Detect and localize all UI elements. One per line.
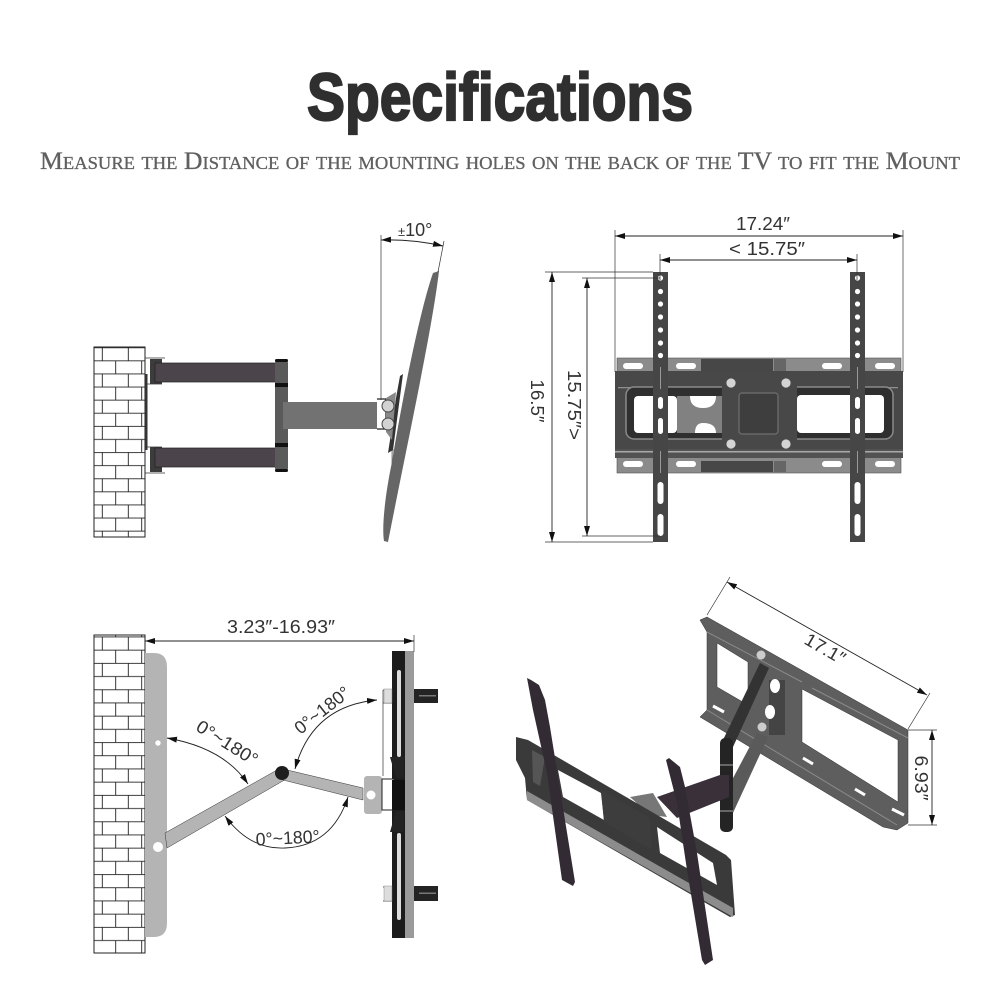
dimension: extension range: 3.23″-16.93″ xyxy=(227,617,336,637)
angle arc: between arms: 0°~180° xyxy=(255,826,320,850)
swivel knuckle xyxy=(630,793,667,817)
right strip xyxy=(666,758,713,965)
left vertical strip xyxy=(653,272,668,542)
dimension: 16.5 inch height xyxy=(527,272,653,542)
wall plate xyxy=(145,653,167,937)
right vertical strip xyxy=(850,272,865,542)
tilt dimension xyxy=(381,220,444,400)
dimension: 6.93 inch xyxy=(908,730,937,825)
title: Specifications xyxy=(307,60,693,135)
dimension: 15.75 inch horizontal: < 15.75″ xyxy=(729,239,806,259)
dimension: 6.93 inch: 6.93″ xyxy=(911,756,931,801)
upper arm xyxy=(155,363,282,382)
angle arc: wall plate to arm xyxy=(167,716,262,784)
upper arm xyxy=(723,663,769,747)
dimension: 17.1 inch xyxy=(707,577,930,729)
wall plate xyxy=(700,617,908,830)
tilt bracket xyxy=(377,374,403,466)
stud upper xyxy=(414,689,438,703)
second arm xyxy=(283,769,363,800)
front arm xyxy=(657,775,729,818)
pivot ball xyxy=(275,766,289,780)
first arm xyxy=(165,770,288,848)
tilt dimension: ±10° xyxy=(398,220,432,240)
wall plate xyxy=(617,358,901,473)
panel: front view with VESA dimensions xyxy=(527,214,903,542)
dimension: 16.5 inch height: 16.5″ xyxy=(527,380,547,423)
TV plate xyxy=(383,271,439,542)
lower arm xyxy=(732,733,768,815)
TV bracket section xyxy=(382,651,414,938)
brick wall xyxy=(94,347,145,537)
TV bracket body xyxy=(615,371,903,458)
subtitle: Measure the Distance of the mounting holes on the back of the TV to fit the Mount xyxy=(40,148,960,175)
angle arc: wall plate to arm: 0°~180° xyxy=(193,716,262,770)
dimension: 15.75 inch horizontal xyxy=(660,239,857,280)
wall bracket edge and fittings xyxy=(145,358,165,473)
dimension: 15.75 inch vertical xyxy=(564,278,660,536)
lower arm xyxy=(155,448,282,467)
angle arc: arm to bracket xyxy=(291,682,377,769)
stud lower xyxy=(414,886,438,901)
angle arc: arm to bracket: 0°~180° xyxy=(291,682,354,738)
dimension: 17.1 inch: 17.1″ xyxy=(801,629,850,669)
TV bracket plate xyxy=(516,737,735,917)
pivot column xyxy=(275,359,288,472)
dimension: 15.75 inch vertical: 15.75″> xyxy=(564,370,584,440)
dimension: 17.24 inch width xyxy=(615,214,903,372)
middle arm xyxy=(283,402,377,429)
left strip xyxy=(527,678,575,886)
column xyxy=(720,738,733,832)
brick wall xyxy=(94,635,145,953)
panel: top view with swivel angles xyxy=(94,617,438,953)
wall plate holes xyxy=(153,740,163,852)
dimension: 17.24 inch width: 17.24″ xyxy=(736,214,791,234)
panel: tilt side view xyxy=(94,220,444,542)
panel: isometric view xyxy=(516,577,937,965)
angle arc: between arms xyxy=(225,797,348,850)
end plate xyxy=(364,776,382,814)
